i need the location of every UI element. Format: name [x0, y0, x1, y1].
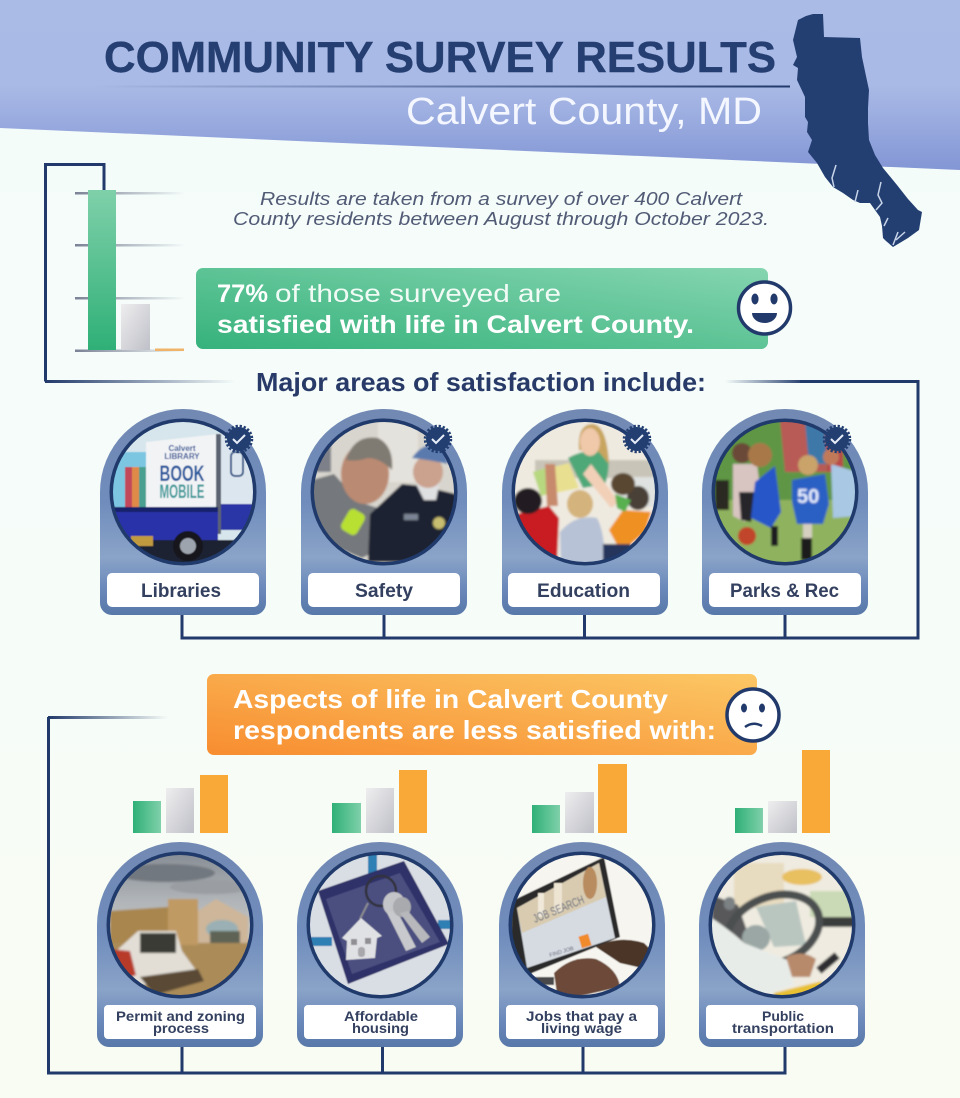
card: Parks and Rec	[702, 409, 868, 615]
callout: less satisfied	[207, 674, 757, 755]
label	[107, 573, 259, 607]
bar chart: 77 percent satisfied	[75, 190, 185, 352]
photo: book mobile: MOBILE	[160, 482, 204, 503]
card: Jobs that pay a living wage	[499, 842, 665, 1047]
callout: 77 percent satisfied: satisfied with life in Calvert County.	[217, 311, 694, 339]
heading: major areas of satisfaction: Major areas of satisfaction include:	[256, 367, 706, 397]
photo: classroom	[510, 417, 660, 568]
label: Public	[762, 1008, 804, 1024]
subtitle: Calvert County, MD	[406, 91, 762, 133]
icon: neutral face	[727, 689, 779, 741]
intro text: Results are taken from a survey of over 400 Calvert	[260, 189, 743, 209]
photo: youth soccer: 50	[797, 486, 819, 508]
bracket: top left connector	[45, 164, 235, 383]
card: Libraries	[100, 409, 266, 615]
photo: bus steering wheel	[707, 850, 858, 1000]
card: Education	[502, 409, 668, 615]
bar chart: public transportation	[735, 750, 830, 833]
check badge	[425, 426, 451, 452]
callout: less satisfied: Aspects of life in Calvert County	[233, 684, 669, 714]
photo: job search laptop	[507, 850, 657, 1001]
icon: Calvert County map	[793, 14, 922, 247]
photo: job search laptop: FIND JOB	[549, 946, 575, 959]
card: Permit and zoning	[97, 842, 263, 1047]
label	[304, 1005, 456, 1039]
photo: house keys	[305, 850, 455, 1000]
header banner	[0, 0, 960, 170]
label: Education	[537, 581, 630, 602]
card: Public transportation	[699, 842, 865, 1047]
title divider	[90, 86, 790, 88]
bar chart: affordable housing	[332, 770, 427, 833]
bar chart: permit and zoning	[133, 775, 228, 833]
photo: book mobile: LIBRARY	[164, 452, 200, 461]
label: Affordable	[344, 1008, 418, 1024]
intro text	[233, 189, 769, 229]
icon: happy face	[738, 282, 790, 334]
card: Affordable housing	[297, 842, 463, 1047]
intro text: County residents between August through October 2023.	[233, 209, 769, 229]
connector: satisfaction cards	[182, 380, 918, 638]
check badge	[624, 426, 650, 452]
photo: youth soccer	[710, 417, 860, 570]
callout: 77 percent satisfied: of those surveyed are	[275, 280, 561, 308]
label: Permit and zoning	[116, 1008, 245, 1024]
label	[506, 1005, 658, 1039]
bar chart: living wage jobs	[532, 764, 627, 833]
label: Libraries	[141, 581, 221, 602]
check badge	[824, 426, 850, 452]
title: COMMUNITY SURVEY RESULTS	[104, 33, 776, 82]
photo: book mobile: Calvert	[168, 444, 196, 453]
callout: 77 percent satisfied	[196, 268, 768, 349]
callout: less satisfied: respondents are less satisfied with:	[233, 715, 716, 745]
label	[508, 573, 660, 607]
connector: dissatisfaction cards	[48, 716, 785, 1073]
label	[308, 573, 460, 607]
callout: 77 percent satisfied: 77%	[217, 280, 268, 308]
check badge	[226, 426, 252, 452]
label	[709, 573, 861, 607]
label: transportation	[732, 1020, 834, 1036]
card: Safety	[301, 409, 467, 615]
label: Parks & Rec	[730, 581, 839, 602]
photo: book mobile	[108, 417, 261, 568]
photo: safety officers	[309, 417, 460, 567]
label	[706, 1005, 858, 1039]
label: process	[153, 1020, 209, 1036]
photo: job search laptop: JOB SEARCH	[531, 893, 586, 926]
photo: construction site	[105, 850, 255, 1000]
label	[104, 1005, 256, 1039]
label: living wage	[541, 1020, 622, 1036]
label: Safety	[355, 581, 413, 602]
photo: book mobile: BOOK	[160, 461, 205, 486]
label: Jobs that pay a	[526, 1008, 637, 1024]
label: housing	[352, 1020, 409, 1036]
